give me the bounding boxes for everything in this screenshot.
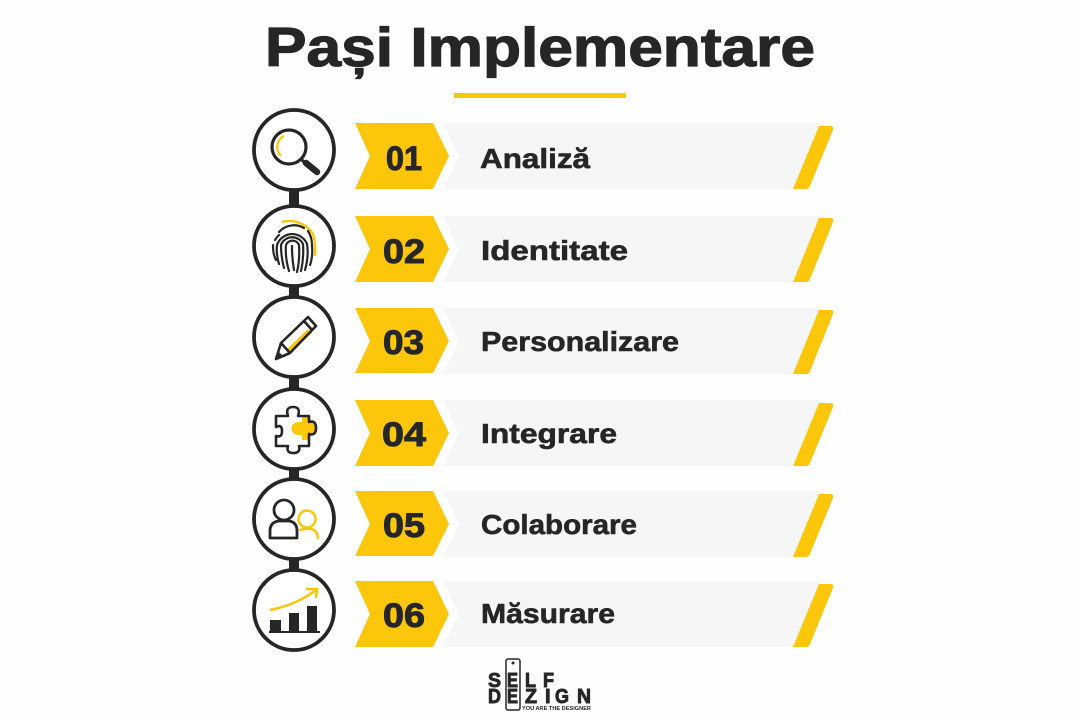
label band: Integrare: Integrare bbox=[481, 418, 617, 449]
number badge 02 bbox=[355, 216, 449, 282]
label band: Colaborare: Colaborare bbox=[481, 509, 637, 540]
number badge 04: 04 bbox=[382, 416, 426, 454]
number badge 01: 01 bbox=[386, 140, 422, 178]
step 4 bbox=[254, 389, 833, 469]
logo: Self Dezign: Z bbox=[525, 686, 537, 708]
label band: Personalizare: Personalizare bbox=[481, 326, 679, 357]
number badge 06: 06 bbox=[383, 597, 425, 635]
logo: Self Dezign: D bbox=[488, 686, 501, 708]
logo: Self Dezign: E bbox=[507, 686, 518, 708]
label band: Analiză bbox=[443, 123, 833, 189]
logo: Self Dezign: S bbox=[488, 670, 501, 692]
icon: magnifying glass bbox=[254, 110, 334, 190]
number badge 03: 03 bbox=[383, 324, 424, 362]
icon: puzzle piece bbox=[254, 389, 334, 469]
step 5 bbox=[254, 479, 833, 559]
number badge 05 bbox=[355, 491, 449, 556]
step 6 bbox=[254, 570, 833, 650]
number badge 01 bbox=[355, 123, 449, 189]
logo: Self Dezign: E bbox=[507, 670, 518, 692]
label band: Măsurare: Măsurare bbox=[481, 598, 615, 629]
label band: Identitate bbox=[443, 216, 833, 282]
logo: Self Dezign: I bbox=[545, 686, 551, 708]
label band: Identitate: Identitate bbox=[481, 235, 628, 266]
label band: Analiză: Analiză bbox=[480, 143, 590, 174]
title: Pași Implementare bbox=[265, 16, 815, 79]
label band: Integrare bbox=[443, 400, 833, 466]
step 2 bbox=[254, 206, 833, 286]
number badge 04 bbox=[355, 400, 449, 466]
number badge 02: 02 bbox=[383, 233, 425, 271]
icon: pencil bbox=[254, 297, 334, 377]
logo: Self Dezign: G bbox=[555, 686, 569, 708]
logo: Self Dezign: L bbox=[525, 670, 536, 692]
logo: Self Dezign bbox=[488, 659, 591, 712]
number badge 05: 05 bbox=[383, 507, 425, 545]
icon: growth chart bbox=[254, 570, 334, 650]
label band: Colaborare bbox=[443, 491, 833, 557]
logo: Self Dezign: YOU ARE THE DESIGNER bbox=[522, 706, 591, 712]
number badge 06 bbox=[355, 581, 449, 647]
timeline connectors bbox=[289, 188, 299, 573]
step 1 bbox=[254, 110, 833, 190]
step 3 bbox=[254, 297, 833, 377]
label band: Personalizare bbox=[443, 308, 833, 374]
label band: Măsurare bbox=[443, 581, 833, 647]
icon: fingerprint bbox=[254, 206, 334, 286]
logo: Self Dezign: N bbox=[577, 686, 591, 708]
number badge 03 bbox=[355, 308, 449, 373]
icon: two people bbox=[254, 479, 334, 559]
logo: Self Dezign: F bbox=[543, 670, 554, 692]
title underline bbox=[454, 93, 626, 98]
